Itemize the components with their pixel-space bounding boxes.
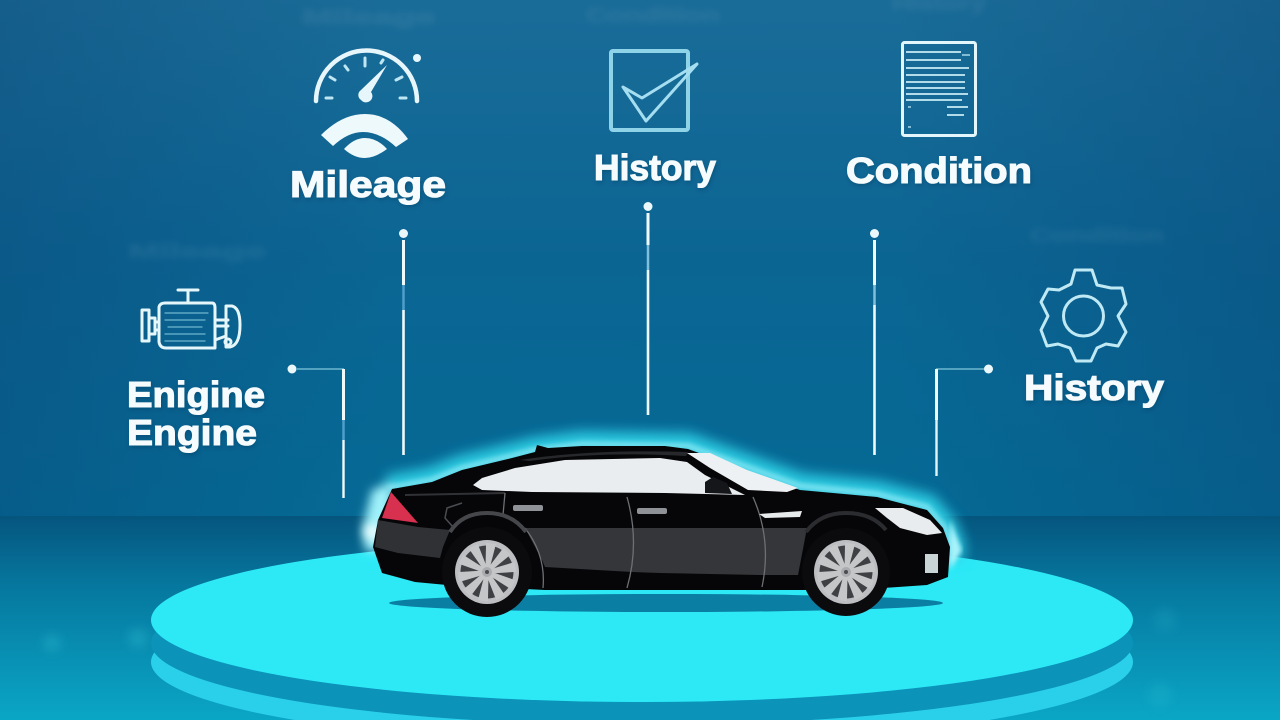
car fog lamp	[925, 554, 938, 573]
icon: document	[902, 42, 976, 136]
platform dark band	[151, 561, 1133, 720]
car windshield	[687, 453, 798, 492]
car belt line	[405, 493, 505, 495]
icon: speedometer gauge	[316, 51, 421, 102]
faint ghost labels: Condition	[1030, 225, 1164, 247]
car door seams	[503, 493, 765, 588]
icon: gear	[1041, 270, 1126, 361]
heading: History centre: History	[594, 147, 716, 188]
car fuel door	[445, 503, 462, 527]
faint ghost labels	[128, 0, 1164, 263]
connector: history right	[936, 364, 993, 476]
car grey side band	[525, 528, 807, 575]
icon: road arc	[321, 114, 408, 158]
heading: Enigine Engine: Engine	[127, 412, 257, 453]
background floor	[0, 516, 1280, 720]
faint ghost labels: Mileage	[128, 241, 266, 263]
heading: Enigine Engine: Enigine	[127, 374, 265, 415]
car	[373, 445, 950, 617]
heading: Mileage: Mileage	[290, 164, 446, 205]
car rear wheel	[442, 513, 532, 617]
car mirror	[705, 477, 732, 494]
car rear band	[375, 520, 450, 558]
car body	[373, 445, 950, 590]
heading: History right: History	[1024, 367, 1164, 408]
connector: engine	[288, 364, 344, 498]
car door handles	[513, 505, 543, 511]
car glow	[325, 444, 962, 570]
faint ghost labels: Mileage	[302, 7, 436, 29]
background wall	[0, 0, 1280, 516]
car headlight	[875, 508, 942, 535]
faint ghost labels: Condition	[586, 5, 720, 27]
icon: engine	[142, 290, 240, 348]
platform top face	[151, 538, 1133, 702]
heading: Enigine Engine	[127, 374, 265, 453]
icon: checkbox	[611, 51, 697, 130]
connector: condition	[870, 229, 879, 455]
connector: mileage	[399, 229, 408, 455]
connector: history centre	[644, 202, 652, 415]
car shadow	[389, 594, 943, 612]
heading: Condition: Condition	[846, 150, 1032, 191]
car side windows	[473, 458, 745, 495]
car front wheel	[802, 513, 890, 616]
platform	[151, 538, 1133, 720]
platform lower tier	[151, 580, 1133, 720]
car tail light	[382, 492, 418, 523]
car roof highlight	[520, 451, 688, 461]
